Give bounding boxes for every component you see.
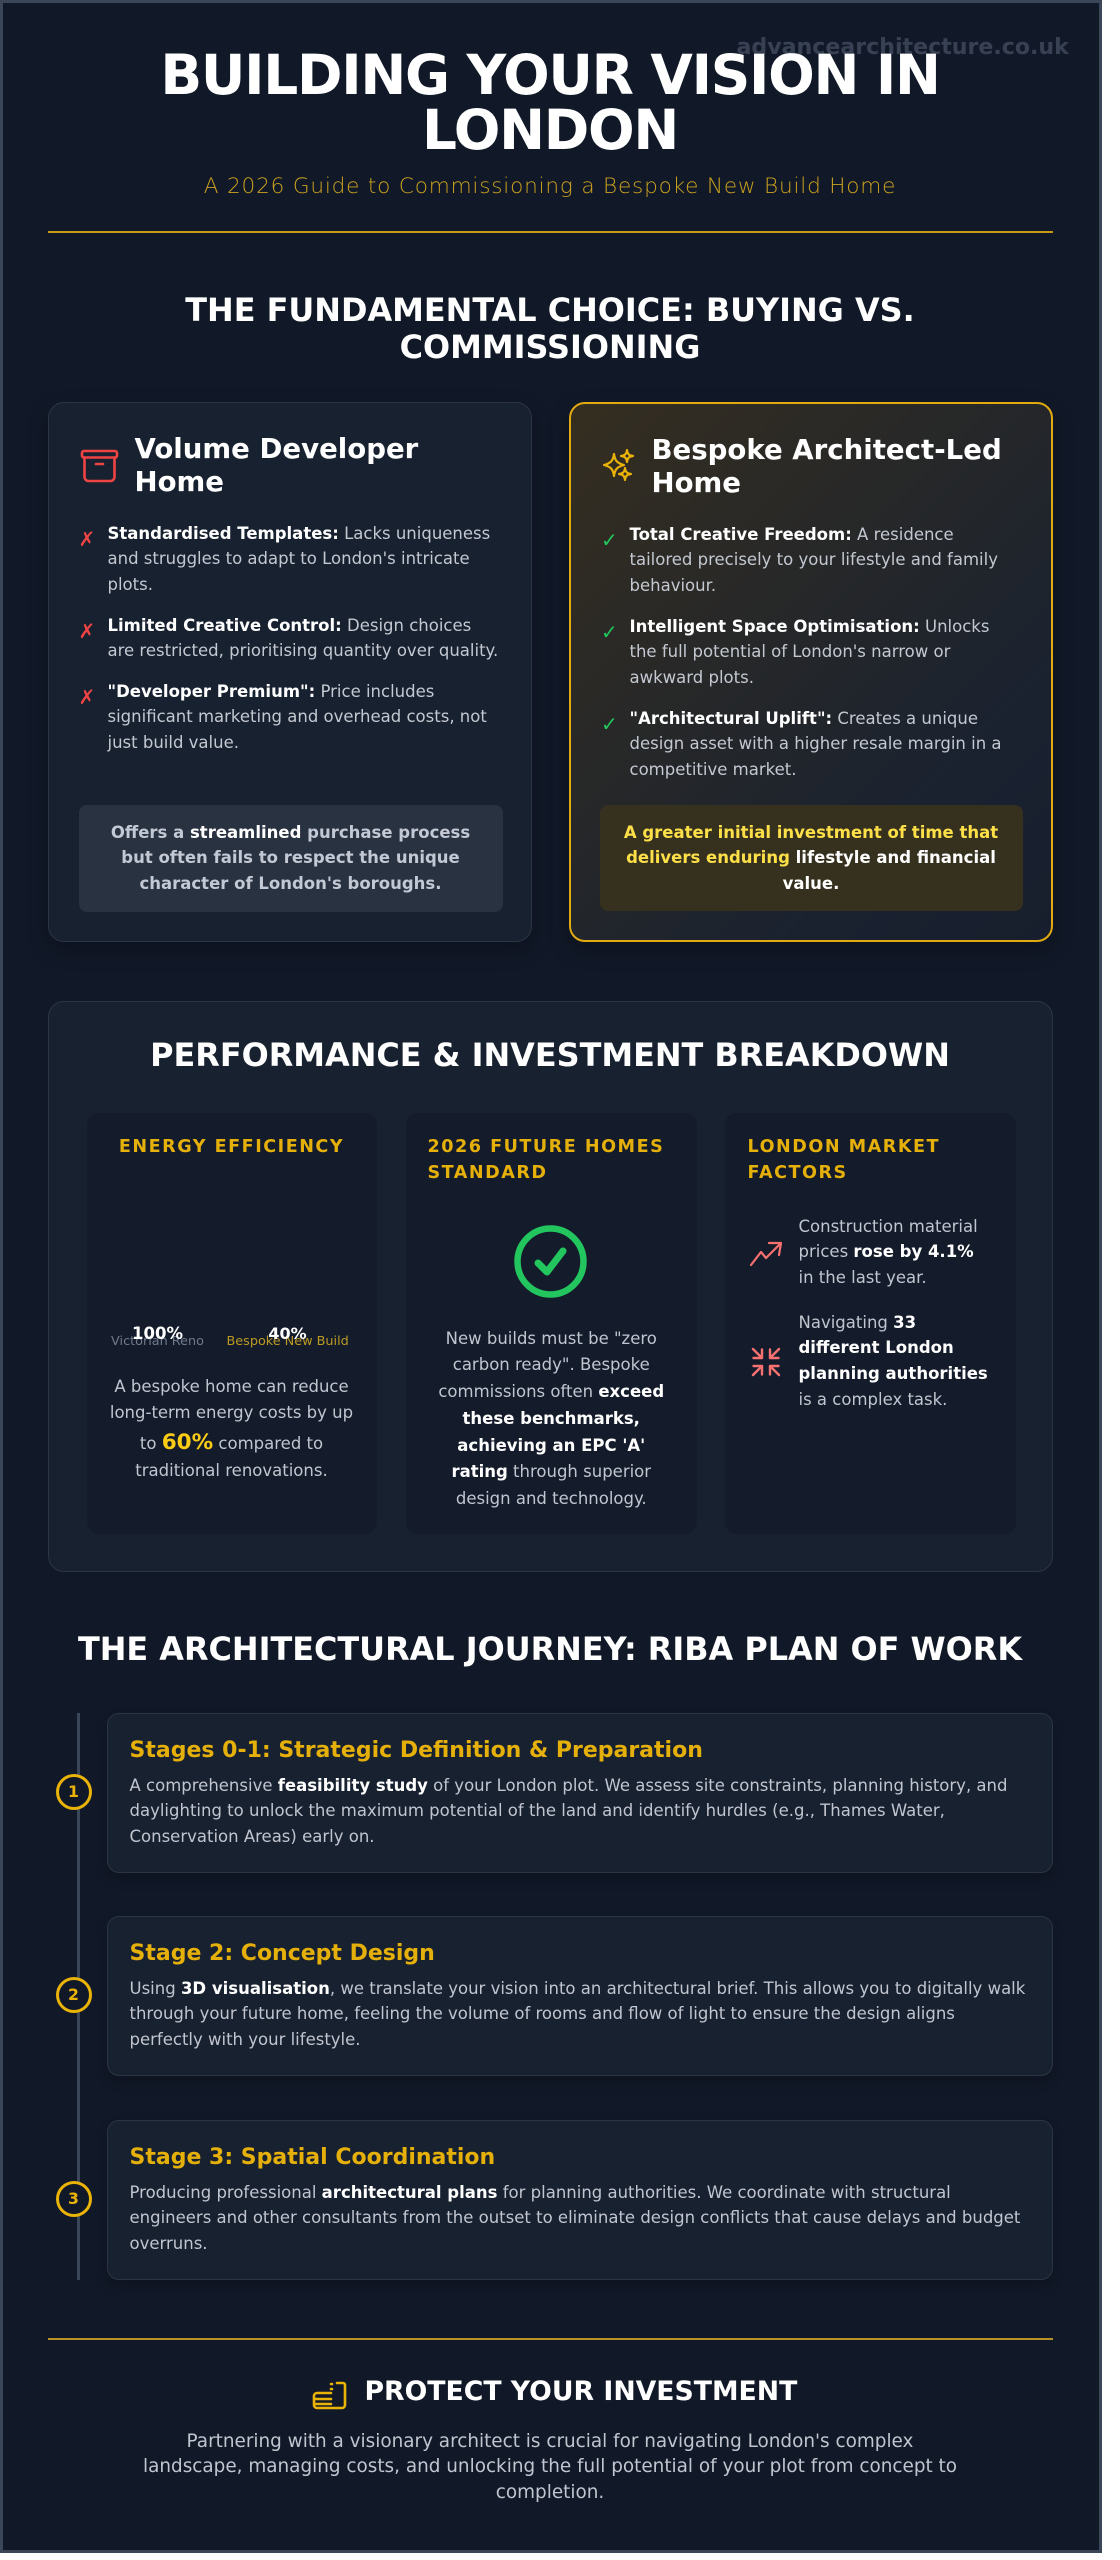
standard text: achieving an EPC 'A' [457, 1436, 645, 1455]
step 2 [56, 1916, 1053, 2076]
item text [107, 682, 487, 752]
step text: Using 3D visualisation, we translate your vision into an architectural brief. This allows you to digitally walk [130, 1978, 1025, 1998]
heading: the fundamental choice [185, 290, 915, 366]
timeline line [76, 1712, 80, 2280]
heading: the architectural journey: THE ARCHITECTURAL JOURNEY: RIBA PLAN OF WORK [78, 1630, 1022, 1668]
icon: archive box [80, 450, 118, 482]
energy text: long-term energy costs by up [110, 1403, 353, 1422]
value: 100%: 100% [132, 1324, 183, 1342]
item text: "Developer Premium": Price includes [108, 682, 434, 700]
icon: green check circle [514, 1225, 587, 1298]
icon: check: ✓ [601, 712, 618, 736]
watermark: advancearchitecture.co.uk [736, 34, 1069, 60]
panel: volume developer home [48, 402, 532, 942]
sub-panel: london market factors [724, 1112, 1016, 1534]
sub-panel heading [748, 1136, 940, 1182]
list item: total creative freedom [601, 524, 998, 595]
item text: "Architectural Uplift": Creates a unique [630, 708, 978, 728]
standard text: rating through superior [451, 1462, 651, 1481]
list item: limited creative control [78, 616, 498, 660]
item text: just build value. [108, 733, 239, 752]
factor text: planning authorities: Navigating 33 [798, 1312, 916, 1332]
icon: check: ✓ [601, 528, 618, 552]
item text: the full potential of London's narrow or [630, 642, 950, 661]
card heading: Bespoke Architect-Led [652, 432, 1002, 466]
icon: arrows pointing in [752, 1348, 780, 1376]
footer text: landscape, managing costs, and unlocking the full potential of your plot from concept to [143, 2456, 957, 2477]
sub-panel heading [428, 1136, 664, 1182]
energy text: to 60% compared to [140, 1430, 323, 1454]
step 1 [56, 1713, 1053, 1873]
item text: tailored precisely to your lifestyle and family [630, 550, 998, 569]
sub-panel heading: 2026 FUTURE HOMES [428, 1136, 664, 1156]
header rule [48, 230, 1053, 233]
title [160, 42, 940, 162]
standard text: commissions often exceed [438, 1382, 664, 1401]
panel: bespoke architect-led home [569, 402, 1053, 942]
sub-panel heading: LONDON MARKET [748, 1136, 940, 1156]
item text: plots. [108, 575, 153, 594]
icon: protect investment [312, 2382, 346, 2410]
callout [78, 804, 502, 912]
card heading: Home [134, 464, 224, 498]
badge 2 [56, 1976, 92, 2012]
item text: and struggles to adapt to London's intricate [108, 549, 470, 568]
step card [106, 2120, 1053, 2280]
energy text: A bespoke home can reduce [114, 1376, 349, 1396]
item text [630, 708, 1002, 779]
card heading [652, 432, 1002, 498]
icon: check: ✓ [601, 620, 618, 644]
card heading [134, 432, 418, 498]
list item: standardised templates [78, 524, 490, 594]
footer text: Partnering with a visionary architect is crucial for navigating London's complex [187, 2430, 913, 2452]
list item: intelligent space optimisation [601, 616, 989, 687]
step card [106, 1916, 1053, 2076]
step text: Producing professional architectural plans for planning authorities. We coordinate with structural [130, 2182, 951, 2202]
panel: performance and investment breakdown [48, 1000, 1053, 1572]
footer text: completion. [496, 2482, 604, 2503]
sub-panel: energy efficiency [86, 1112, 376, 1534]
factor text: planning authorities: different London [798, 1338, 954, 1357]
value: 40%: 40% [268, 1324, 307, 1342]
item text [630, 616, 989, 687]
title: BUILDING YOUR VISION IN [160, 42, 940, 106]
standard text [438, 1328, 664, 1508]
list item: architectural uplift [601, 708, 1002, 779]
title: LONDON [422, 98, 678, 162]
standard text: these benchmarks, [463, 1409, 640, 1428]
subtitle: A 2026 Guide to Commissioning a Bespoke New Build Home [204, 174, 896, 198]
item text: behaviour. [630, 576, 716, 595]
step text [130, 1776, 1007, 1846]
step text: overruns. [130, 2234, 208, 2253]
heading: performance and investment breakdown: PERFORMANCE & INVESTMENT BREAKDOWN [150, 1036, 950, 1074]
heading: the fundamental choice: COMMISSIONING [400, 328, 700, 366]
badge 3 [56, 2180, 92, 2216]
callout: character of London's boroughs. [139, 874, 442, 893]
step text [130, 1978, 1026, 2049]
callout: value. [783, 874, 839, 893]
item text: Standardised Templates: Lacks uniqueness [108, 524, 490, 542]
sub-panel heading: ENERGY EFFICIENCY [119, 1136, 344, 1156]
standard text: carbon ready". Bespoke [453, 1355, 650, 1374]
sub-panel heading: STANDARD [428, 1162, 548, 1182]
standard text: design and technology. [456, 1489, 647, 1508]
list item: developer premium [78, 682, 487, 752]
step title: Stage 3: Spatial Coordination [130, 2144, 495, 2170]
step text [130, 2182, 1020, 2253]
sub-panel: 2026 future homes standard [406, 1112, 696, 1534]
step text: engineers and other consultants from the outset to eliminate design conflicts that cause delays and budget [130, 2208, 1020, 2227]
heading: the fundamental choice: THE FUNDAMENTAL CHOICE: BUYING VS. [185, 290, 915, 328]
icon: cross: ✗ [78, 684, 95, 708]
item text [108, 524, 490, 594]
step title: Stage 2: Concept Design [130, 1940, 435, 1966]
badge 1 [56, 1774, 92, 1810]
footer heading: PROTECT YOUR INVESTMENT [364, 2376, 797, 2406]
factor text: material prices: Construction material [798, 1216, 978, 1236]
factor text: material prices: in the last year. [798, 1268, 927, 1287]
item text: are restricted, prioritising quantity over quality. [108, 641, 498, 660]
footer text [143, 2430, 957, 2503]
callout: but often fails to respect the unique [121, 848, 460, 867]
bar chart labels [111, 1324, 349, 1348]
icon: cross: ✗ [78, 526, 95, 550]
standard text: New builds must be "zero [446, 1328, 657, 1348]
energy text [110, 1376, 353, 1480]
factor text: material prices [798, 1216, 978, 1287]
step card [106, 1712, 1053, 1872]
icon: cross: ✗ [78, 618, 95, 642]
factor text: planning authorities: is a complex task. [798, 1390, 947, 1409]
step text: Conservation Areas) early on. [130, 1827, 375, 1846]
card heading: Home [652, 466, 741, 498]
icon: sparkles [602, 449, 634, 482]
step 3 [56, 2120, 1053, 2280]
sub-panel heading: FACTORS [748, 1162, 848, 1182]
energy text: traditional renovations. [135, 1460, 328, 1480]
item text [630, 524, 998, 595]
badge 3: 3 [68, 2188, 79, 2208]
item text: design asset with a higher resale margin in a [630, 734, 1002, 753]
item text: Total Creative Freedom: A residence [630, 524, 954, 544]
step text: A comprehensive feasibility study of your London plot. We assess site constraints, planning history, and [130, 1776, 1007, 1794]
factor text: planning authorities [798, 1312, 988, 1409]
callout [600, 804, 1022, 910]
item text: significant marketing and overhead costs, not [108, 707, 487, 726]
factor text: planning authorities: planning authorities [798, 1364, 988, 1383]
item text: Intelligent Space Optimisation: Unlocks [630, 616, 989, 636]
icon: trending up [750, 1242, 782, 1266]
item text: competitive market. [630, 760, 796, 779]
step title: Stages 0-1: Strategic Definition & Preparation [130, 1738, 703, 1762]
badge 1: 1 [68, 1782, 79, 1800]
item text: awkward plots. [630, 668, 754, 687]
step text: daylighting to unlock the maximum potential of the land and identify hurdles (e.g., Thames Water, [130, 1801, 945, 1820]
callout: Offers a streamlined purchase process [111, 822, 470, 842]
callout: A greater initial investment of time that [624, 822, 998, 842]
footer rule [48, 2338, 1053, 2340]
callout: delivers enduring lifestyle and financial [626, 848, 996, 867]
step text: through your future home, feeling the volume of rooms and flow of light to ensure the design aligns [130, 2004, 955, 2023]
factor text: material prices: prices rose by 4.1% [798, 1242, 974, 1261]
card heading: Volume Developer [134, 432, 418, 464]
label: victorian reno: Victorian Reno [111, 1334, 204, 1348]
step text: perfectly with your lifestyle. [130, 2030, 361, 2049]
item text: Limited Creative Control: Design choices [108, 616, 471, 634]
badge 2: 2 [68, 1984, 79, 2004]
item text [108, 616, 498, 660]
label: bespoke new build: Bespoke New Build [226, 1334, 349, 1348]
